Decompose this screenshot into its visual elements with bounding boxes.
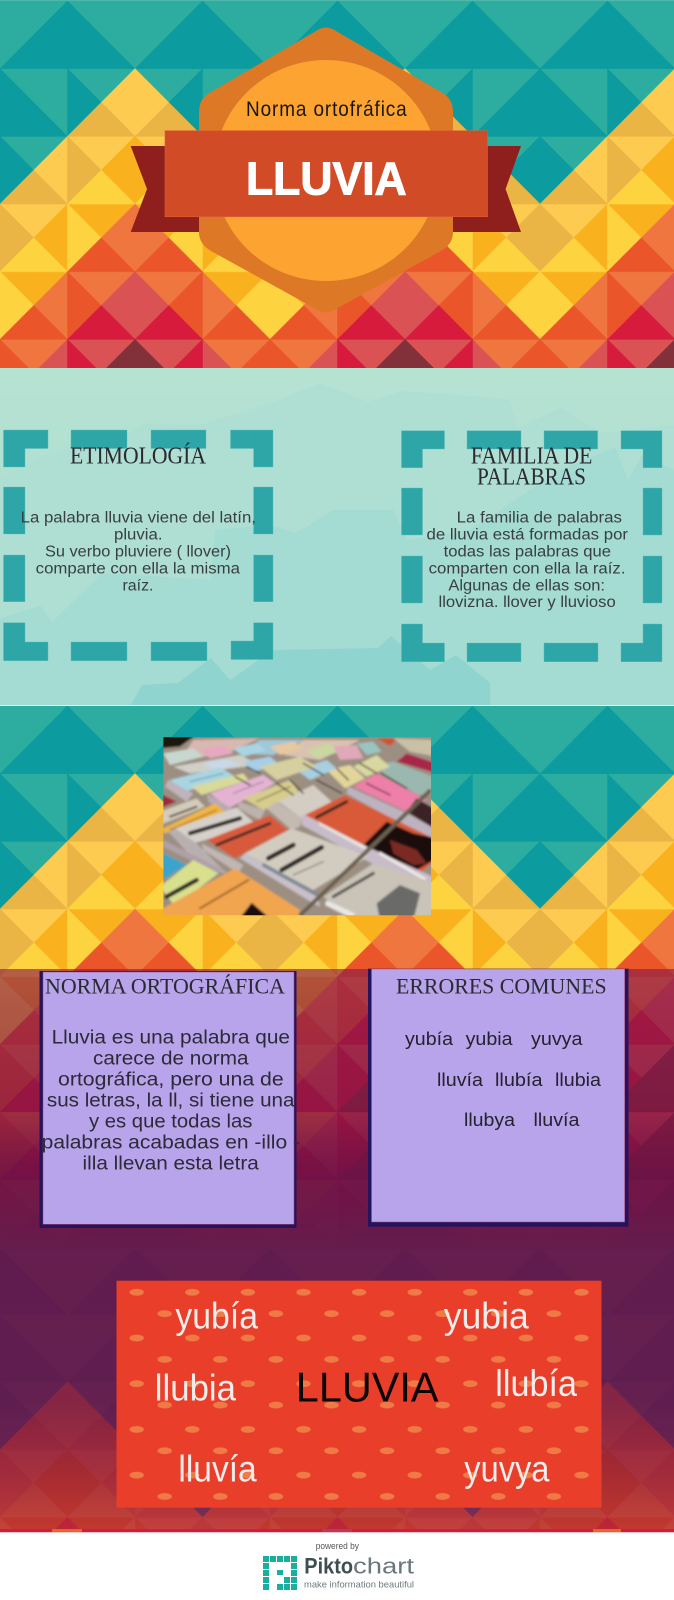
text: familia de palabras body: todas las palabras que [444,544,611,561]
word: yubía: yubía [175,1295,258,1336]
panel: errores comunes [368,969,628,1227]
panel: mint section [0,368,674,706]
text: etimología body: Su verbo pluviere ( llover) [45,544,231,561]
text: etimología body: La palabra lluvia viene del latín, [21,510,256,527]
text: familia de palabras body: de lluvia está formadas por [426,527,628,544]
brand name: Pikto [304,1553,353,1578]
powered by: powered by [316,1541,359,1552]
text: norma ortográfica body: illa llevan esta letra [82,1153,259,1174]
word: yuvya: yuvya [464,1449,550,1490]
text: etimología body [21,510,256,594]
text: norma ortográfica body: carece de norma [93,1048,249,1069]
word: yubia: yubia [444,1295,529,1336]
text: familia de palabras body: La familia de palabras [457,510,622,527]
text: norma ortográfica body [42,1027,300,1174]
title: LLUVIA [246,152,407,204]
text: norma ortográfica body: palabras acabadas en -illo - [42,1132,300,1153]
text: etimología body: raíz. [122,577,154,594]
badge [199,28,453,312]
word: llubia: llubia [155,1368,236,1409]
text: common misspellings: llubya [464,1110,516,1130]
text: norma ortográfica body: y es que todas las [89,1111,252,1132]
word: llubía: llubía [495,1363,577,1404]
subtitle: Norma ortofráfica [246,98,408,121]
icon: piktochart logo [263,1556,297,1590]
photo: rows of books [160,733,437,920]
text: familia de palabras body [426,510,628,611]
header background pattern [0,0,674,368]
text: common misspellings: llubía [495,1070,544,1090]
heading: familia de palabras: FAMILIA DE [471,444,592,470]
text: common misspellings: lluvía [437,1070,484,1090]
heading: familia de palabras [471,444,592,490]
text: common misspellings [405,1029,602,1130]
brand name light: chart [353,1553,414,1578]
text: common misspellings: yubía [405,1029,454,1049]
text: common misspellings: lluvía [534,1110,581,1130]
panel: word cloud [116,1281,602,1508]
text: norma ortográfica body: Lluvia es una palabra que [52,1027,290,1048]
text: common misspellings: yubia [466,1029,514,1049]
text: norma ortográfica body: ortográfica, pero una de [58,1069,284,1090]
text: common misspellings: yuvya [531,1029,584,1049]
footer [0,1532,674,1600]
text: common misspellings: llubia [555,1070,602,1090]
heading: norma ortográfica: NORMA ORTOGRÁFICA [45,974,285,999]
middle background pattern [0,706,674,969]
panel: norma ortográfica [40,971,300,1228]
ribbon banner [165,131,488,217]
text: familia de palabras body: llovizna. llover y lluvioso [438,594,616,611]
ribbon tail left [131,146,199,232]
lower background pattern [0,969,674,1532]
text: etimología body: pluvia. [114,527,162,544]
text: familia de palabras body: Algunas de ellas son: [448,577,605,594]
heading: etimología: ETIMOLOGÍA [70,444,207,470]
ribbon tail right [453,146,521,232]
word: lluvía: lluvía [178,1449,257,1490]
heading: errores comunes: ERRORES COMUNES [396,974,607,999]
word: LLUVIA: LLUVIA [296,1364,438,1411]
heading: familia de palabras: PALABRAS [477,464,586,490]
dashed frame: familia de palabras [402,431,662,662]
dashed frame: etimología [4,430,273,661]
text: norma ortográfica body: sus letras, la ll, si tiene una [47,1090,295,1111]
tagline: make information beautiful [304,1579,414,1590]
text: familia de palabras body: comparten con ella la raíz. [429,560,626,578]
text: etimología body: comparte con ella la misma [36,560,240,578]
